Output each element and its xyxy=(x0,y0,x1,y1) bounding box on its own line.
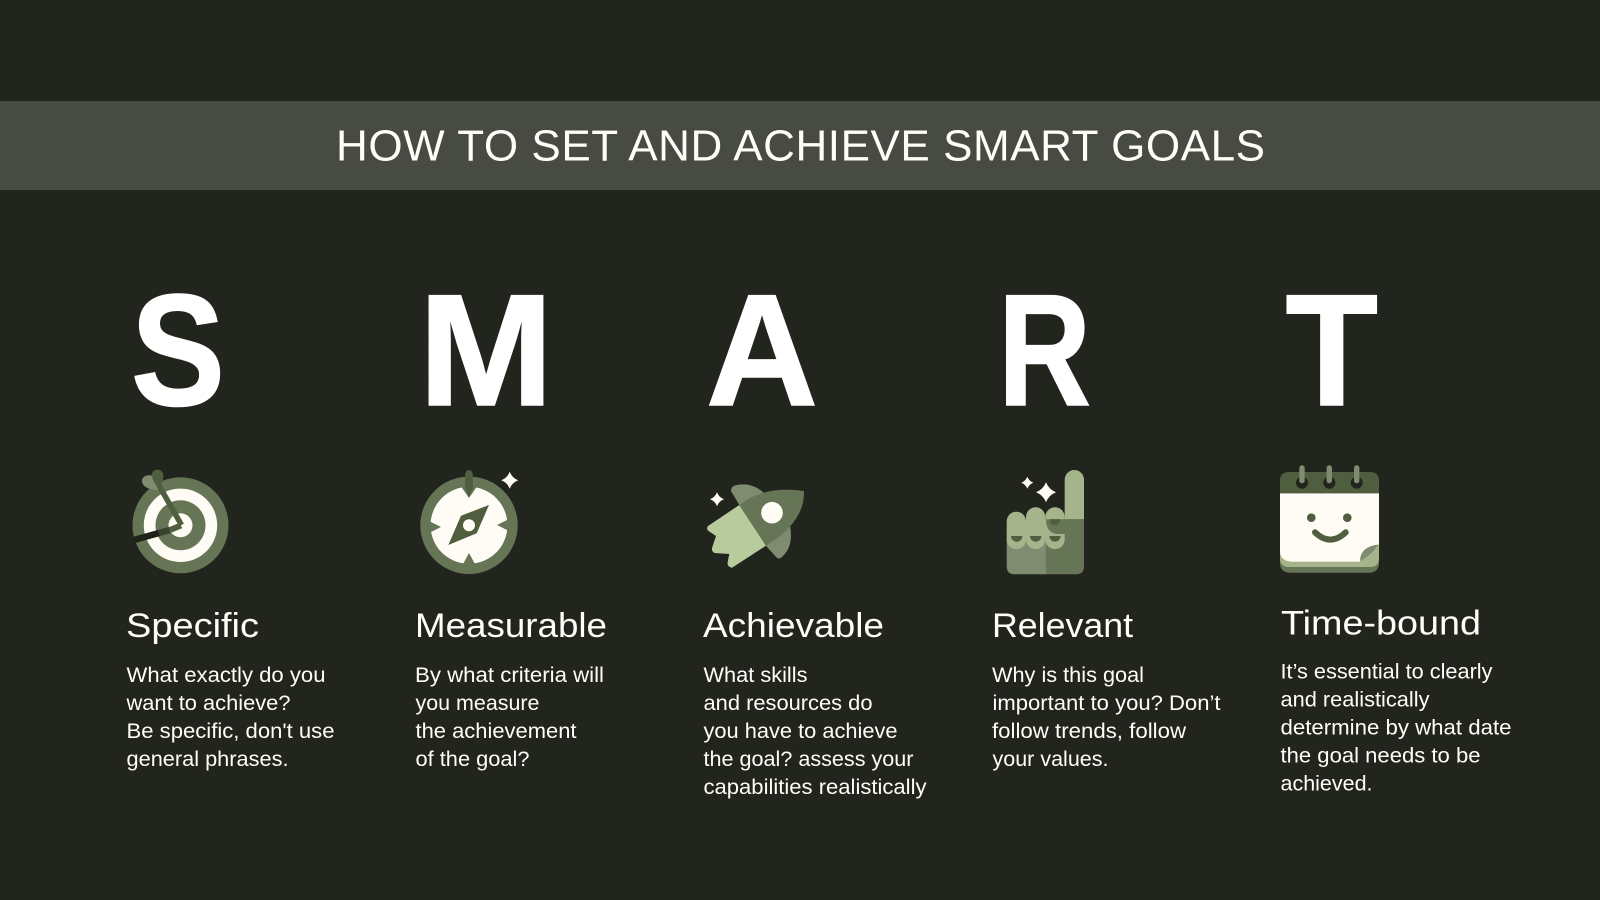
description: time-bound: and realistically xyxy=(1280,688,1430,711)
icon: target with dart xyxy=(132,470,228,573)
description: specific: Be specific, don't use xyxy=(126,720,334,743)
description: measurable: of the goal? xyxy=(416,748,530,771)
description: time-bound: determine by what date xyxy=(1280,716,1512,739)
description: time-bound: It’s essential to clearly xyxy=(1280,660,1493,683)
description: relevant: your values. xyxy=(992,748,1108,771)
description: specific xyxy=(125,664,335,771)
icon: compass xyxy=(420,470,518,574)
letter R: R xyxy=(998,261,1091,439)
description: relevant: follow trends, follow xyxy=(992,720,1187,743)
description: time-bound: the goal needs to be xyxy=(1280,744,1480,767)
heading: Achievable: Achievable xyxy=(703,607,884,645)
heading: Specific: Specific xyxy=(126,607,259,645)
description: time-bound xyxy=(1280,660,1512,795)
description: specific: general phrases. xyxy=(126,748,288,771)
description: relevant xyxy=(992,664,1221,771)
panel: measurable xyxy=(415,261,607,771)
description: time-bound: achieved. xyxy=(1280,772,1372,795)
panel: achievable xyxy=(703,261,927,799)
panel: time-bound xyxy=(1280,261,1512,795)
description: relevant: Why is this goal xyxy=(992,664,1144,687)
description: measurable: the achievement xyxy=(416,720,577,743)
description: measurable: you measure xyxy=(416,692,540,715)
panel: specific xyxy=(125,261,335,771)
icon: hand with raised finger xyxy=(1007,470,1084,574)
description: achievable xyxy=(704,664,927,799)
letter A: A xyxy=(706,261,818,439)
description: specific: want to achieve? xyxy=(125,692,291,715)
description: achievable: What skills xyxy=(704,664,808,687)
description: measurable: By what criteria will xyxy=(415,664,604,687)
icon: smiling calendar xyxy=(1280,465,1379,573)
description: achievable: the goal? assess your xyxy=(704,748,914,771)
description: achievable: capabilities realistically xyxy=(704,776,927,799)
heading: Relevant: Relevant xyxy=(992,607,1133,645)
title band xyxy=(0,101,1600,190)
heading: Time-bound: Time-bound xyxy=(1281,604,1481,642)
description: specific: What exactly do you xyxy=(126,664,326,687)
description: achievable: and resources do xyxy=(704,692,872,715)
heading: Measurable: Measurable xyxy=(415,607,607,645)
description: relevant: important to you? Don’t xyxy=(992,692,1221,715)
letter S: S xyxy=(131,261,225,439)
letter M: M xyxy=(418,261,554,439)
description: measurable xyxy=(415,664,604,771)
panel: relevant xyxy=(992,261,1221,771)
icon: rocket xyxy=(707,484,804,568)
description: achievable: you have to achieve xyxy=(704,720,898,743)
title: HOW TO SET AND ACHIEVE SMART GOALS xyxy=(336,122,1265,170)
letter T: T xyxy=(1286,261,1378,439)
